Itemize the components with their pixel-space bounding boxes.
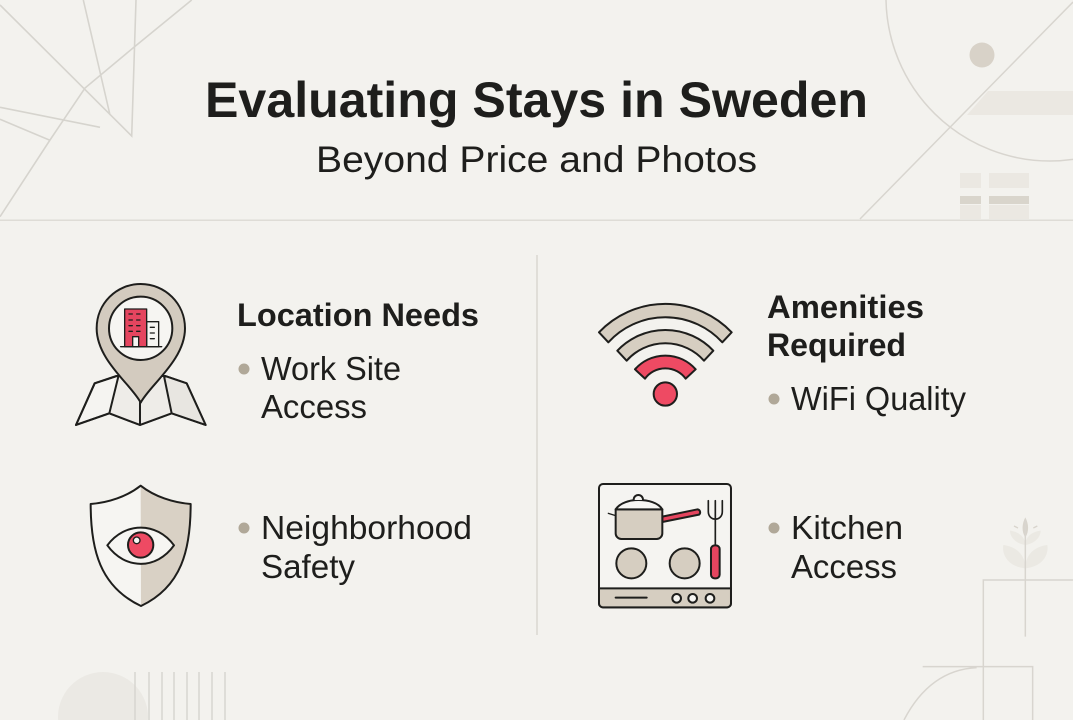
icon: stove with pot and fork	[599, 484, 731, 607]
icon: map pin with building	[76, 284, 206, 425]
title: Evaluating Stays in Sweden	[205, 72, 868, 128]
heading: amenities required	[767, 289, 924, 363]
bullet: kitchen access: Kitchen	[791, 509, 903, 546]
subtitle: Beyond Price and Photos	[316, 139, 757, 180]
icon: wifi signal	[599, 304, 732, 406]
heading: location needs: Location Needs	[237, 297, 479, 333]
bullet: work site access: Work Site	[261, 350, 401, 387]
icon: shield with eye	[91, 486, 191, 606]
bullet: kitchen access	[768, 509, 903, 585]
bullet: neighborhood safety	[238, 509, 472, 585]
bullet: kitchen access: Access	[791, 548, 897, 585]
bullet: work site access: Access	[261, 388, 367, 425]
heading: amenities required: Required	[767, 327, 906, 363]
bullet: neighborhood safety: Safety	[261, 548, 355, 585]
bullet: work site access	[238, 350, 401, 425]
heading: amenities required: Amenities	[767, 289, 924, 325]
bullet: wifi quality: WiFi Quality	[791, 380, 966, 417]
bullet: neighborhood safety: Neighborhood	[261, 509, 472, 546]
